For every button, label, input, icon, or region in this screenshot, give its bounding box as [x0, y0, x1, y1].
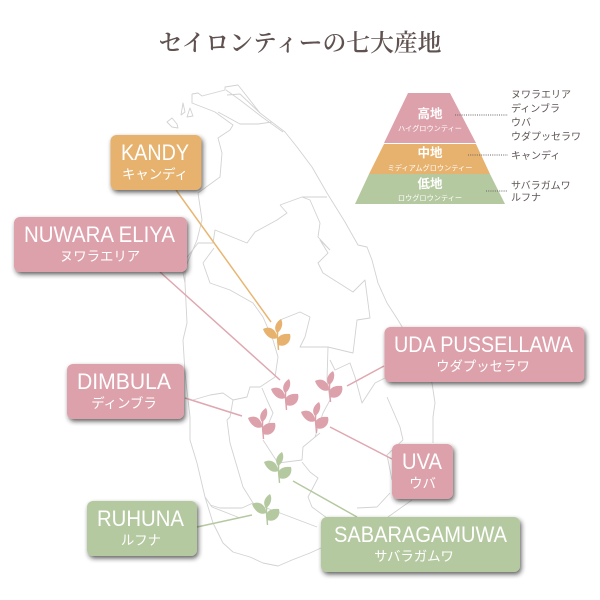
mid-grown list: キャンディ: [511, 149, 560, 162]
label: Ruhuna: [87, 501, 197, 556]
low-grown list: [486, 180, 571, 204]
tea leaf: Nuwara Eliya: [271, 379, 298, 410]
high-grown tier: [384, 93, 476, 143]
low-grown list: ルフナ: [511, 192, 541, 204]
high-grown list: ヌワラエリア: [511, 89, 571, 101]
label: Uva: ウバ: [409, 476, 436, 491]
label: Uva: UVA: [402, 449, 442, 474]
mid-grown tier: ミディアムグロウンティー: [388, 164, 472, 172]
low-grown tier: [355, 174, 505, 204]
label: Dimbula: ディンブラ: [91, 395, 157, 411]
low-grown list: サバラガムワ: [511, 180, 571, 192]
label: Uva: [392, 444, 453, 499]
high-grown list: ウダプッセラワ: [511, 130, 581, 143]
low-grown tier: ロウグロウンティー: [398, 194, 462, 202]
pyramid: tea elevation: [355, 89, 581, 204]
high-grown list: [455, 89, 581, 143]
label: Ruhuna: RUHUNA: [97, 506, 184, 531]
label: Sabaragamuwa: サバラガムワ: [374, 549, 454, 564]
connector lines: [160, 190, 392, 527]
label: Kandy: KANDY: [121, 140, 189, 165]
label: Nuwara Eliya: [14, 217, 187, 272]
low-grown tier: 低地: [417, 176, 443, 191]
tea leaf: Ruhuna: [252, 494, 279, 525]
title: セイロンティーの七大産地: [159, 30, 442, 57]
tea leaf: Uda Pussellawa: [315, 371, 342, 402]
label: Nuwara Eliya: ヌワラエリア: [60, 249, 140, 264]
label: Dimbula: DIMBULA: [77, 369, 171, 394]
mid-grown tier: 中地: [417, 145, 443, 160]
label: Uda Pussellawa: ウダプッセラワ: [436, 359, 530, 374]
tea leaf: Kandy: [263, 319, 290, 350]
map of Sri Lanka: [167, 85, 435, 566]
label: Kandy: [110, 135, 202, 190]
label: Dimbula: [67, 364, 184, 419]
mid-grown tier: [369, 144, 490, 174]
high-grown tier: ハイグロウンティー: [398, 124, 462, 133]
label: Kandy: キャンディ: [122, 166, 188, 182]
label: Uda Pussellawa: UDA PUSSELLAWA: [394, 332, 573, 357]
label: Sabaragamuwa: SABARAGAMUWA: [334, 522, 507, 547]
tea leaf: Dimbula: [248, 408, 275, 439]
tea leaf: Uva: [301, 402, 328, 433]
mid-grown list: [468, 149, 560, 162]
high-grown tier: 高地: [417, 106, 443, 121]
label: Nuwara Eliya: NUWARA ELIYA: [24, 222, 175, 247]
label: Sabaragamuwa: [321, 517, 520, 572]
label: Uda Pussellawa: [384, 327, 584, 382]
label: Ruhuna: ルフナ: [121, 533, 161, 548]
tea leaf: Sabaragamuwa: [264, 452, 291, 483]
high-grown list: ディンブラ: [511, 102, 560, 115]
high-grown list: ウバ: [511, 117, 531, 129]
